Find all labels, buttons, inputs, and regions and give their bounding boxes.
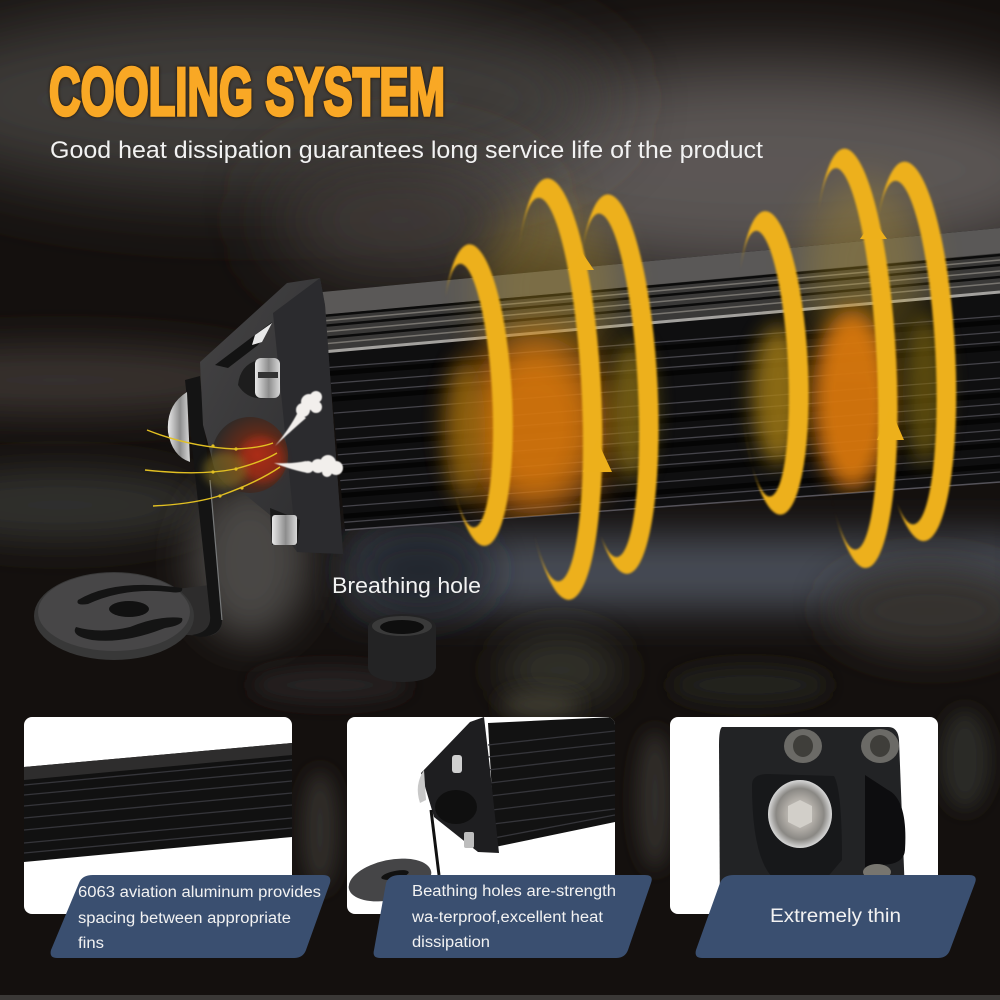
panel: bar fins photo [24, 717, 292, 914]
intake line dots [211, 444, 244, 498]
LED light bar [322, 228, 1000, 530]
bar side fins [322, 316, 1000, 524]
photo: end cap [719, 727, 906, 884]
airflow arrows [568, 220, 904, 472]
caption 3 [696, 875, 976, 958]
caption 2: Beathing holes are-strength [412, 883, 616, 900]
title: COOLING SYSTEM [49, 54, 445, 130]
caption 1: fins [78, 935, 104, 952]
photo: fin extrusion [24, 743, 292, 862]
label: breathing hole: Breathing hole [332, 573, 481, 598]
caption 1 [51, 875, 330, 958]
breathing hole button [212, 417, 288, 493]
ring 4 [732, 209, 816, 516]
ring 3 [579, 192, 667, 575]
ring 1 [436, 242, 520, 548]
caption 2 [374, 875, 652, 958]
photo: bracket and bar [345, 717, 615, 908]
intake air lines [145, 430, 280, 506]
bracket cut-outs [215, 322, 272, 368]
caption 3: Extremely thin [770, 906, 901, 927]
caption 2: dissipation [412, 934, 490, 951]
panel: thin profile photo [670, 717, 938, 920]
silver bolt head [168, 392, 190, 462]
bar upper ribs [322, 253, 1000, 352]
caption 1: 6063 aviation aluminum provides [78, 884, 321, 901]
bar top face [322, 228, 1000, 315]
bracket foot disc [34, 572, 222, 660]
bracket plate [200, 278, 343, 554]
airflow rings [436, 146, 965, 602]
bracket vertical arm [185, 376, 222, 637]
caption 2: wa-terproof,excellent heat [411, 909, 604, 926]
mounting bracket [34, 278, 343, 660]
ring 2 [513, 176, 612, 602]
subtitle: Good heat dissipation guarantees long service life of the product [50, 137, 763, 164]
caption 1: spacing between appropriate [78, 910, 291, 927]
steam puffs [274, 391, 343, 477]
ring 5 [811, 146, 907, 570]
breathing hole cap [368, 614, 436, 682]
ring 6 [875, 159, 965, 543]
heat glow on bar [445, 180, 947, 515]
panel: breathing hole photo [345, 717, 615, 914]
